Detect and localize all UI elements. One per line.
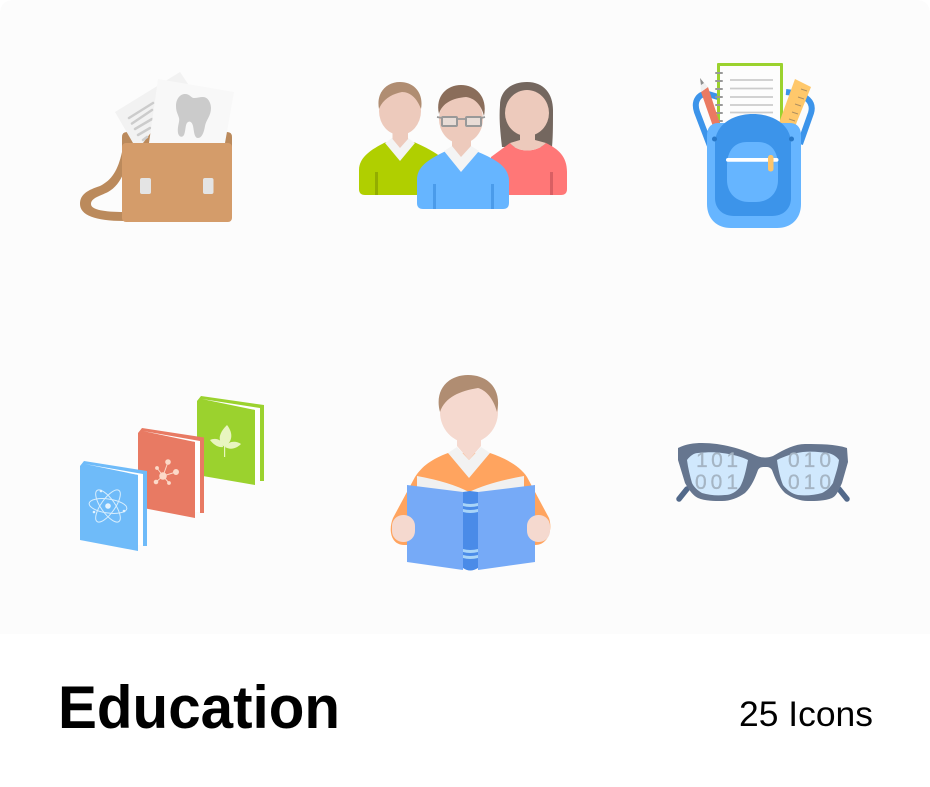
person: right, red sweater — [491, 82, 567, 195]
icon: person reading a book — [391, 375, 550, 570]
person: left, green sweater — [359, 82, 442, 195]
icon: glasses with binary code — [678, 443, 848, 501]
icon count: 25 Icons — [739, 695, 873, 734]
binary digits — [695, 449, 831, 494]
title: Education — [58, 674, 340, 741]
binary digits: 010 — [788, 471, 831, 494]
book: chemistry, red — [138, 428, 204, 518]
book: biology, green — [197, 396, 264, 485]
icon: school backpack with notebook, pencil and ruler — [696, 63, 812, 228]
book: physics, blue — [80, 461, 147, 551]
icon: three subject books — [80, 396, 264, 551]
icon: group of three people — [359, 82, 567, 209]
binary digits: 010 — [788, 449, 831, 472]
binary digits: 001 — [695, 471, 738, 494]
person: centre, blue sweater with glasses — [417, 85, 509, 209]
binary digits: 101 — [696, 449, 738, 472]
icon: satchel with dental papers — [80, 72, 234, 222]
